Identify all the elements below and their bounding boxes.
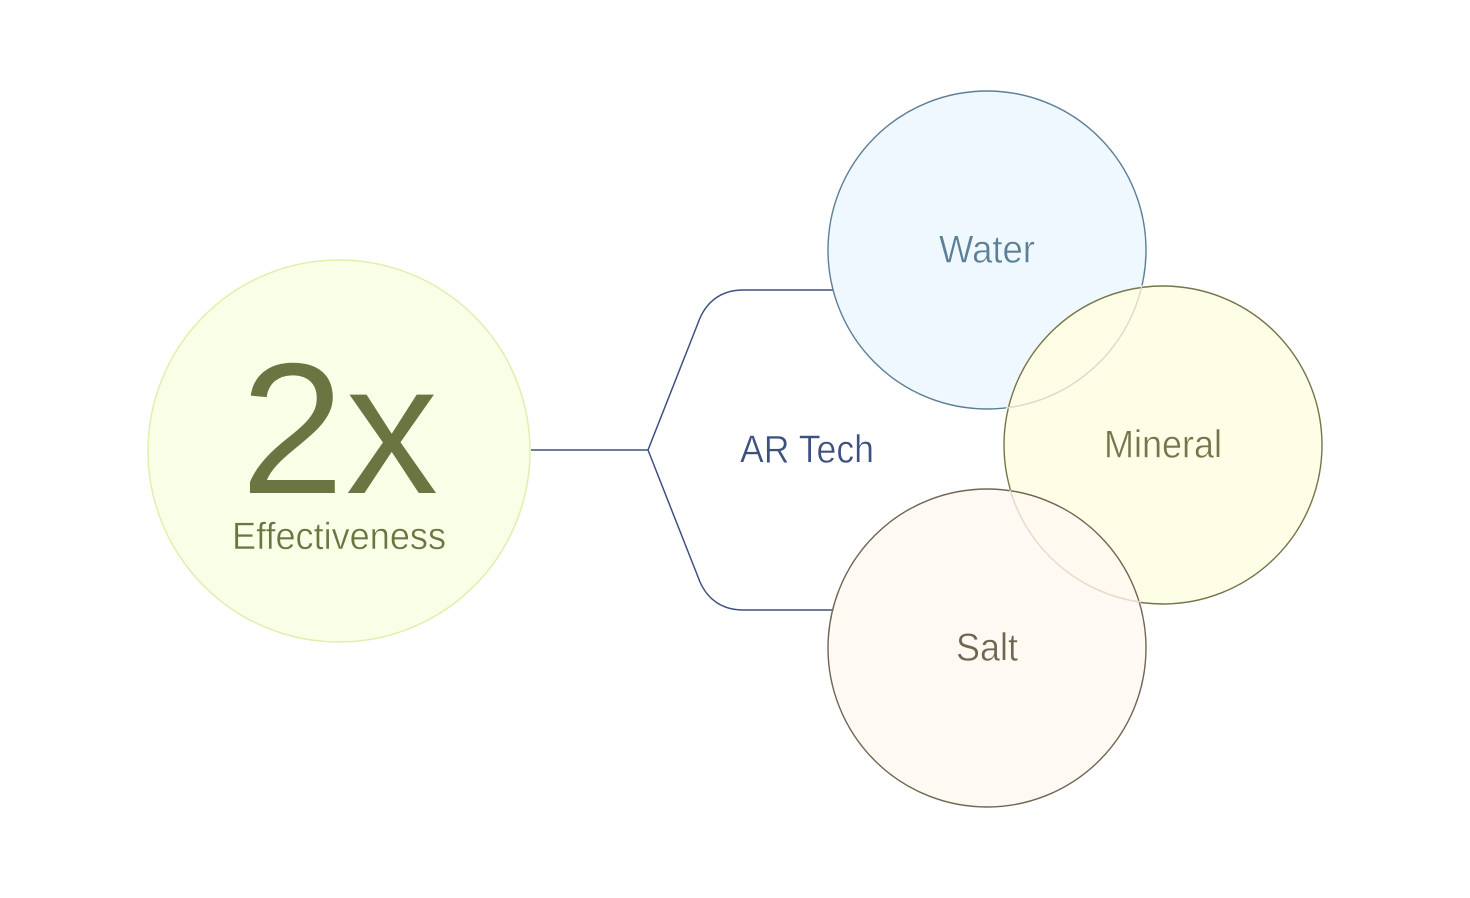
big number: 2x: 2x — [240, 324, 439, 534]
label: AR Tech: AR Tech — [740, 428, 874, 472]
overlap edge: mineral circle seen through salt circle — [1010, 490, 1141, 602]
label: Water: Water — [939, 228, 1035, 272]
circle: salt — [828, 489, 1146, 807]
circle: water — [828, 91, 1146, 409]
overlap edge: water circle seen through mineral circle — [1006, 285, 1142, 408]
circle: mineral — [1004, 286, 1322, 604]
circle: effectiveness — [148, 260, 530, 642]
label: Mineral: Mineral — [1104, 424, 1222, 466]
label: Salt: Salt — [956, 626, 1018, 670]
label: Effectiveness: Effectiveness — [232, 516, 446, 558]
connector: bracket linking effectiveness circle to the three circles — [531, 290, 834, 610]
